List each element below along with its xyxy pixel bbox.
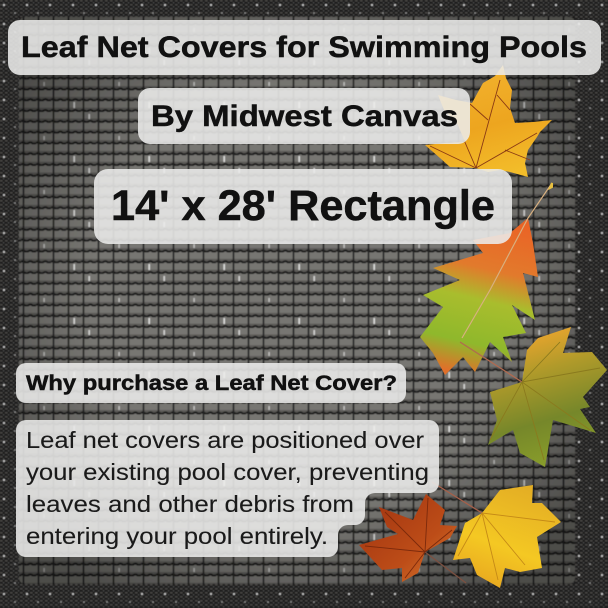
size banner: 14' x 28' Rectangle [111,182,495,230]
leaf: maple green-yellow [460,327,607,467]
body text block: your existing pool cover, preventing [26,459,429,485]
title banner [8,20,601,75]
brand banner [138,88,470,144]
leaf: yellow bottom [432,482,561,588]
leaf: green-orange middle [420,183,552,375]
title banner: Leaf Net Covers for Swimming Pools [21,31,587,64]
body text block [16,420,439,557]
brand banner: By Midwest Canvas [151,100,458,133]
leaf: red bottom [359,494,466,583]
leaf: yellow-orange top [425,65,552,177]
body text block: entering your pool entirely. [26,523,328,549]
body text block: leaves and other debris from [26,491,354,517]
size banner [94,169,512,244]
body text block: Leaf net covers are positioned over [26,427,424,453]
question heading [16,363,406,403]
question heading: Why purchase a Leaf Net Cover? [26,372,397,395]
